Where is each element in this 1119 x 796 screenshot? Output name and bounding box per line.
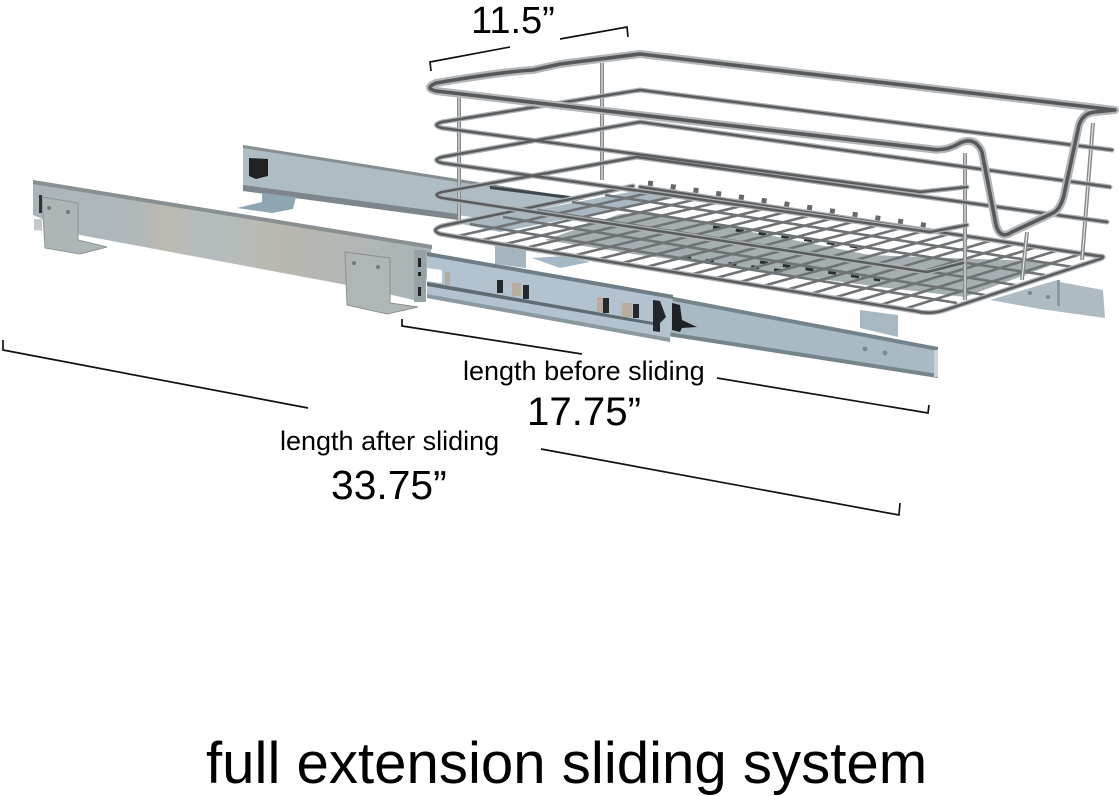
floor wire grid bbox=[458, 190, 1081, 309]
wire basket bbox=[430, 54, 1115, 313]
vertical posts bbox=[459, 63, 1093, 300]
right mounting bracket bbox=[345, 252, 418, 314]
far side slide rail end bbox=[990, 280, 1105, 318]
dimension label: 11.5: 11.5” bbox=[471, 0, 555, 42]
inner slide rail extension bbox=[668, 296, 938, 378]
dimension label: 17.75: 17.75” bbox=[527, 389, 641, 434]
back rail mounting foot bbox=[237, 193, 296, 213]
front extended slide rail bbox=[33, 180, 432, 314]
side rails bbox=[436, 90, 1112, 272]
basket floor base bbox=[435, 187, 1103, 313]
support tab under basket bbox=[495, 245, 590, 268]
middle telescopic slide bbox=[427, 252, 697, 342]
back slide rail bbox=[237, 145, 590, 232]
dimension label: 33.75: 33.75” bbox=[331, 462, 447, 508]
slots seen through floor bbox=[683, 227, 880, 280]
floor back edge ticks bbox=[648, 183, 930, 226]
dimension bracket: length after sliding bbox=[3, 340, 900, 515]
dimension bracket: length before sliding bbox=[402, 319, 929, 413]
floor outline bbox=[435, 186, 1103, 313]
dimension bracket: width 11.5 bbox=[430, 27, 628, 71]
left mounting bracket bbox=[42, 197, 107, 254]
icon: back rail black clip bbox=[249, 158, 268, 179]
rail front bracket bbox=[860, 310, 898, 337]
label: length after sliding: length after sliding bbox=[280, 426, 499, 456]
title: full extension sliding system bbox=[206, 731, 927, 796]
top rim and handle bbox=[430, 54, 1115, 235]
label: length before sliding: length before sliding bbox=[463, 356, 705, 386]
